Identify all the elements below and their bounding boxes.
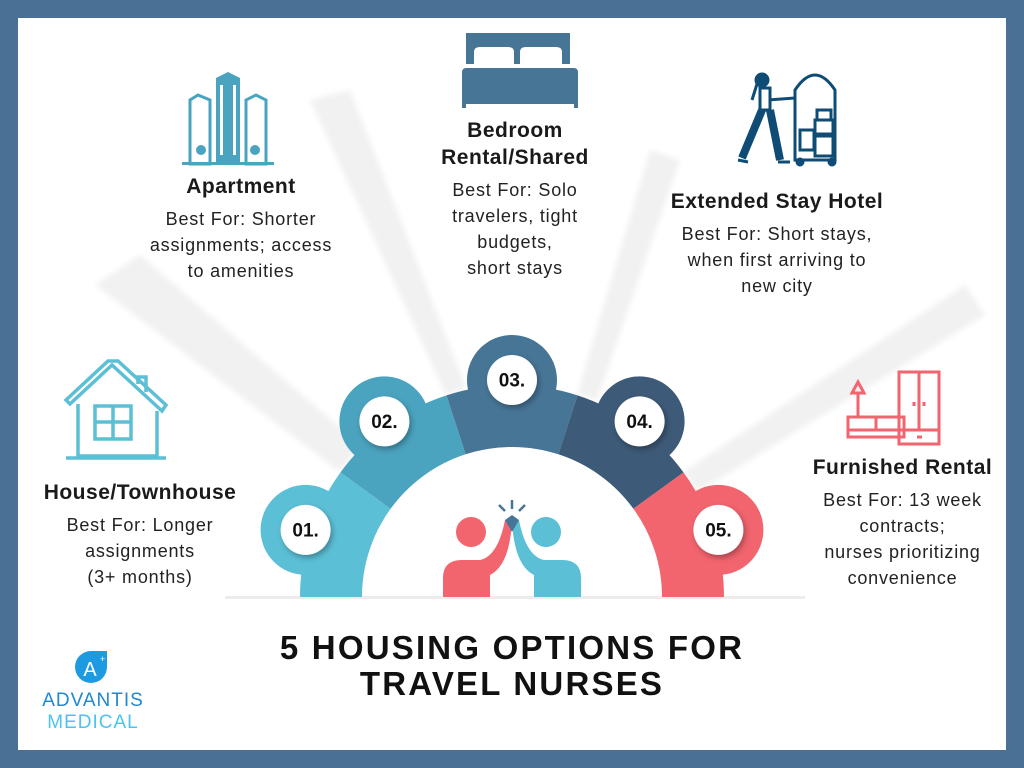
logo [42,651,144,733]
badge 02: 02. [371,412,398,433]
segment 04 [558,376,685,509]
text: furnished rental: nurses prioritizing convenience [824,542,981,588]
badge 04: 04. [626,412,653,433]
text: extended stay hotel: new city [741,276,813,296]
title [280,629,744,702]
badge 04 [615,396,665,446]
badge 05 [693,505,743,555]
logo text: MEDICAL [47,712,139,733]
number badges [281,355,743,555]
text: apartment: Apartment [186,175,296,198]
text: bedroom rental [441,119,589,278]
semicircle ring [261,335,763,597]
icon: house [66,361,166,458]
badge 03 [487,355,537,405]
text: apartment: Best For: Shorter assignments; access to amenities [150,209,332,281]
segment 01 [261,472,391,597]
text: extended stay hotel: Extended Stay Hotel [671,190,883,213]
text: apartment [150,175,332,281]
logo text: ADVANTIS [42,690,144,711]
segment 03 [446,335,578,454]
text: house [44,481,236,587]
logo text [42,690,144,733]
badge 02 [359,396,409,446]
icon: high five people [443,500,581,597]
text: extended stay hotel: when first arriving to [688,250,866,270]
logo icon: + [100,654,105,664]
title: TRAVEL NURSES [360,665,664,702]
text: extended stay hotel: Best For: Short stays, [682,224,872,244]
text: bedroom rental: short stays [467,258,563,278]
logo icon: A [83,659,97,681]
logo icon [75,651,107,683]
text: furnished rental [813,456,992,588]
badge 01: 01. [292,520,319,542]
title: 5 HOUSING OPTIONS FOR [280,629,744,666]
text: extended stay hotel [671,190,883,296]
badge 01 [281,505,331,555]
text: furnished rental: Furnished Rental [813,456,992,479]
icon: bed [462,33,578,108]
text: house: (3+ months) [87,567,193,587]
text: house: House/Townhouse [44,481,236,504]
segment 02 [339,376,466,509]
text: bedroom rental: Best For: Solo travelers, tight budgets, [452,180,578,252]
text: bedroom rental: Bedroom Rental/Shared [441,119,589,169]
segment 05 [633,472,763,597]
floor line [225,596,805,599]
icon: apartment buildings [182,72,274,165]
text: furnished rental: Best For: 13 week contracts; [823,490,982,536]
icon: bellhop with cart [738,74,835,165]
badge 05: 05. [705,520,732,542]
badge 03: 03. [499,370,525,392]
text: house: Best For: Longer assignments [67,515,213,561]
light rays [95,90,985,492]
icon: furniture [848,372,939,444]
